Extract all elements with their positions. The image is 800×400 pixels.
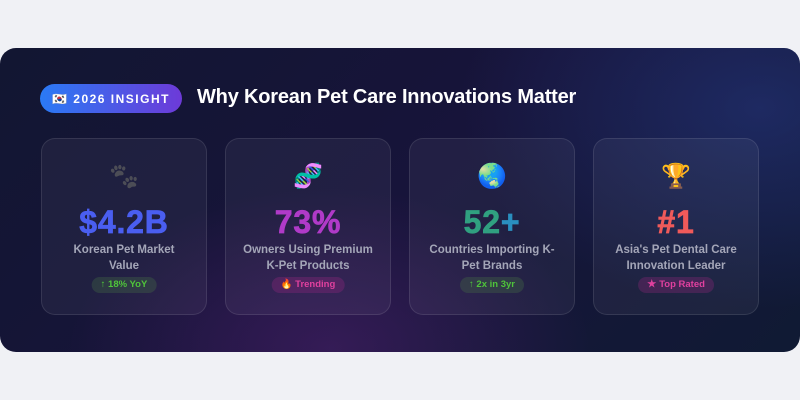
panel: main dark card [0,48,800,352]
card: premium owners [225,138,391,315]
label: Countries Importing K- [429,244,555,256]
label: K-Pet Products [266,260,350,272]
title: Why Korean Pet Care Innovations Matter [197,86,576,108]
label [74,244,174,272]
chip: trending [272,277,344,293]
icon: paws: 🐾 [109,163,139,190]
number: #1: #1 [657,204,695,240]
number: 73%: 73% [275,204,341,240]
chip: 2x in 3yr [460,277,524,293]
label: Innovation Leader [626,260,726,272]
icon: trophy: 🏆 [661,163,691,190]
label: Asia's Pet Dental Care [615,244,737,256]
chip: 18% YoY [92,277,156,293]
label: Owners Using Premium [243,244,373,256]
label: Pet Brands [462,260,522,272]
label: Value [109,260,139,272]
label [243,244,373,272]
icon: globe: 🌏 [477,163,507,190]
badge: 2026 insight [40,84,182,113]
label [429,244,555,272]
label [615,244,737,272]
icon: dna: 🧬 [293,163,323,190]
card: countries [409,138,575,315]
chip: top rated [638,277,714,293]
card: dental leader [593,138,759,315]
chip: top rated: ★ Top Rated [647,279,705,290]
chip: trending: 🔥 Trending [281,279,335,290]
badge: 2026 insight: 🇰🇷 2026 INSIGHT [52,92,170,106]
card: market value [41,138,207,315]
chip: 2x in 3yr: ↑ 2x in 3yr [469,279,515,290]
number: $4.2B: $4.2B [79,204,169,240]
chip: 18% YoY: ↑ 18% YoY [101,279,147,290]
label: Korean Pet Market [74,244,174,256]
number: 52+: 52+ [464,204,520,240]
